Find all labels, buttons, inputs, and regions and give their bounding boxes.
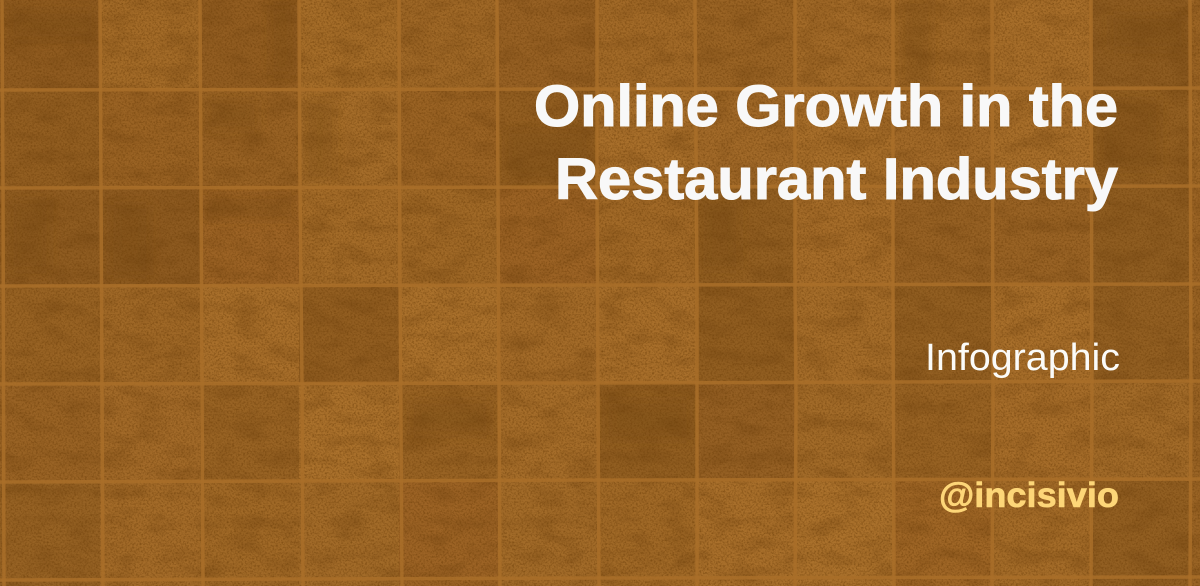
- subtitle: Infographic: [925, 337, 1120, 379]
- tile row 3: [0, 187, 1200, 285]
- tile row 1: [0, 0, 1200, 89]
- handle: @incisivio: [939, 476, 1119, 515]
- tile row 6: [0, 481, 1200, 586]
- title line 1: Online Growth in the: [534, 74, 1118, 139]
- title line 2: Restaurant Industry: [555, 147, 1118, 212]
- title: [534, 74, 1118, 212]
- tile row 5: [0, 383, 1200, 481]
- tile row 2: [0, 89, 1200, 187]
- tile shading patches: [10, 0, 1185, 440]
- tile row 4: [0, 285, 1200, 383]
